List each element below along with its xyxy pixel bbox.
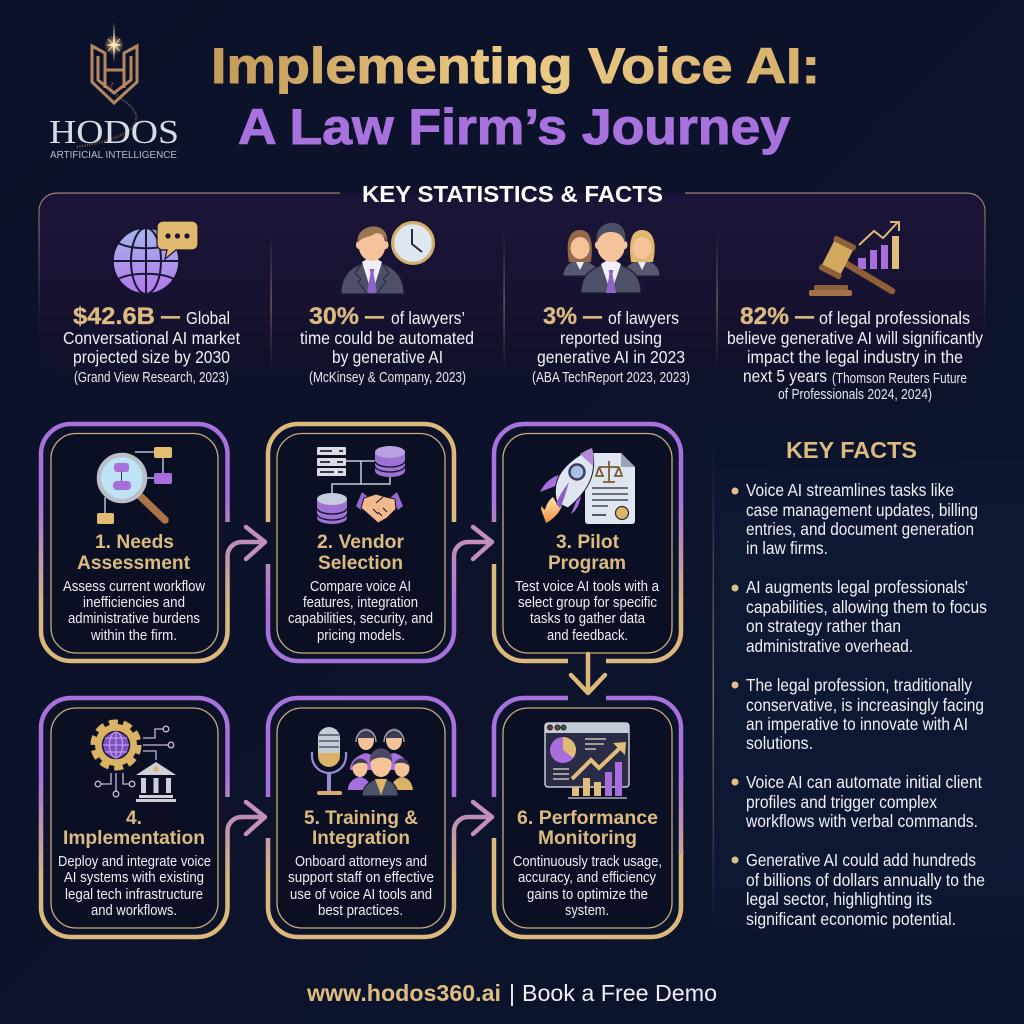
title bbox=[211, 38, 820, 155]
step description bbox=[63, 578, 205, 644]
stat 1: — bbox=[161, 303, 180, 330]
icon: magnifier over flowchart bbox=[97, 447, 172, 524]
step description: and workflows. bbox=[91, 902, 177, 919]
fact 2 bbox=[732, 577, 987, 656]
fact 4 bbox=[732, 772, 982, 831]
step title: 3. Pilot bbox=[556, 531, 619, 553]
logo: Hodos Artificial Intelligence bbox=[49, 22, 179, 161]
stat 4 bbox=[727, 222, 983, 403]
stat 2 bbox=[300, 220, 474, 386]
card frame bbox=[494, 424, 681, 661]
stat 4 text: believe generative AI will significantly bbox=[727, 328, 983, 348]
step description: use of voice AI tools and bbox=[290, 886, 432, 903]
fact 3: The legal profession, traditionally bbox=[746, 675, 972, 695]
step title: Monitoring bbox=[538, 827, 637, 849]
stat 3 text: reported using bbox=[560, 328, 662, 348]
stat 1 text: projected size by 2030 bbox=[73, 347, 230, 367]
arrow: step 3 to step 6 bbox=[571, 654, 605, 693]
step description: tasks to gather data bbox=[530, 610, 646, 627]
footer call to action: | bbox=[509, 980, 515, 1006]
card frame bbox=[494, 838, 681, 937]
icon: servers, databases and handshake bbox=[317, 446, 405, 524]
step description: accuracy, and efficiency bbox=[518, 869, 656, 886]
icon: rocket and legal document bbox=[540, 448, 635, 524]
title line 1: Implementing Voice AI: bbox=[211, 38, 820, 94]
fact 1: in law firms. bbox=[746, 538, 828, 558]
process step 4: implementation bbox=[41, 698, 263, 937]
step description: inefficiencies and bbox=[83, 594, 185, 611]
step description: administrative burdens bbox=[68, 610, 200, 627]
fact 4: profiles and trigger complex bbox=[746, 792, 937, 812]
fact 2: administrative overhead. bbox=[746, 636, 913, 656]
stat 1 bbox=[63, 221, 240, 386]
icon: star sparkle bbox=[104, 22, 124, 62]
process step 6: performance monitoring bbox=[494, 698, 681, 937]
stat 3 text: of lawyers bbox=[608, 308, 679, 328]
stat 4 text: of legal professionals bbox=[819, 308, 970, 328]
step description: features, integration bbox=[303, 594, 418, 611]
fact 4: Voice AI can automate initial client bbox=[746, 772, 982, 792]
icon: lawyer with clock bbox=[341, 220, 436, 294]
key facts heading: KEY FACTS bbox=[786, 437, 917, 463]
step description: Onboard attorneys and bbox=[295, 853, 427, 870]
fact 3: an imperative to innovate with AI bbox=[746, 714, 968, 734]
step title: 6. Performance bbox=[517, 807, 658, 829]
step description: system. bbox=[565, 902, 609, 919]
step description: capabilities, security, and bbox=[288, 610, 433, 627]
fact 5: legal sector, highlighting its bbox=[746, 889, 932, 909]
stat 3 value: 3% bbox=[543, 303, 577, 330]
stat 3 text: generative AI in 2023 bbox=[537, 347, 685, 367]
step description: Continuously track usage, bbox=[513, 853, 662, 870]
logo wordmark: HODOS bbox=[49, 114, 179, 151]
logo tagline: ARTIFICIAL INTELLIGENCE bbox=[50, 150, 177, 161]
stat 2 text bbox=[300, 308, 474, 386]
stat 4 text: next 5 years bbox=[743, 366, 827, 386]
stat 4 value: 82% bbox=[740, 303, 789, 330]
step title bbox=[77, 531, 190, 574]
stat 3 text bbox=[532, 308, 690, 386]
stat 3: — bbox=[583, 303, 602, 330]
step description bbox=[513, 853, 662, 919]
icon: gavel and rising chart bbox=[809, 222, 899, 296]
fact 1: Voice AI streamlines tasks like bbox=[746, 480, 954, 500]
section heading: KEY STATISTICS & FACTS bbox=[362, 181, 663, 207]
card frame bbox=[41, 698, 263, 937]
step description bbox=[288, 578, 433, 644]
icon: shield monogram bbox=[92, 46, 137, 103]
step title bbox=[317, 531, 404, 574]
step description: legal tech infrastructure bbox=[65, 886, 203, 903]
stat 1 text: Global bbox=[186, 308, 230, 328]
panel: key facts bbox=[712, 437, 987, 935]
stat 3 bbox=[532, 223, 690, 386]
step title: 1. Needs bbox=[95, 531, 174, 553]
panel: key statistics bbox=[39, 181, 985, 410]
fact 1: entries, and document generation bbox=[746, 519, 974, 539]
step description: gains to optimize the bbox=[527, 886, 648, 903]
icon: group of lawyers bbox=[563, 223, 660, 293]
stat 2: — bbox=[365, 303, 384, 330]
fact 5: of billions of dollars annually to the bbox=[746, 870, 985, 890]
step description: best practices. bbox=[318, 902, 403, 919]
arrow: step 2 to step 3 bbox=[473, 527, 492, 559]
footer call to action: Book a Free Demo bbox=[522, 980, 717, 1006]
stat 4: — bbox=[795, 303, 814, 330]
step title: 2. Vendor bbox=[317, 531, 404, 553]
stat 1 value: $42.6B bbox=[73, 303, 155, 330]
fact 3 bbox=[732, 675, 984, 753]
step description: Deploy and integrate voice bbox=[58, 853, 211, 870]
arrow: step 4 to step 5 bbox=[246, 802, 265, 834]
step description bbox=[288, 853, 434, 919]
fact 3: solutions. bbox=[746, 733, 813, 753]
footer call to action: www.hodos360.ai bbox=[306, 980, 501, 1006]
step title: Integration bbox=[312, 827, 410, 849]
step description: and feedback. bbox=[547, 627, 628, 644]
stat 4 text: impact the legal industry in the bbox=[747, 347, 963, 367]
step title bbox=[63, 807, 205, 849]
step title bbox=[304, 807, 418, 849]
step description: select group for specific bbox=[518, 594, 657, 611]
process step 1: needs assessment bbox=[41, 424, 263, 661]
stat 2 text: of lawyers’ bbox=[391, 308, 465, 328]
step title: Program bbox=[548, 552, 626, 574]
card frame bbox=[268, 424, 454, 522]
stat 4 text: of Professionals 2024, 2024) bbox=[778, 387, 932, 403]
step title bbox=[548, 531, 626, 574]
stat 2 text: time could be automated bbox=[300, 328, 474, 348]
panel background bbox=[39, 193, 985, 410]
fact 2: on strategy rather than bbox=[746, 616, 901, 636]
stat 2 value: 30% bbox=[309, 303, 359, 330]
title line 2: A Law Firm’s Journey bbox=[238, 99, 790, 155]
step description: Assess current workflow bbox=[63, 578, 205, 595]
fact 5: significant economic potential. bbox=[746, 909, 956, 929]
step title: 4. bbox=[126, 807, 142, 829]
step description bbox=[58, 853, 211, 919]
step description: within the firm. bbox=[90, 627, 177, 644]
stat 1 text bbox=[63, 308, 240, 386]
fact 2: capabilities, allowing them to focus bbox=[746, 597, 987, 617]
fact 1: case management updates, billing bbox=[746, 500, 978, 520]
stat 1 text: (Grand View Research, 2023) bbox=[74, 370, 229, 386]
fact 5: Generative AI could add hundreds bbox=[746, 850, 976, 870]
step description bbox=[515, 578, 660, 644]
process step 3: pilot program bbox=[494, 424, 681, 661]
fact 1 bbox=[732, 480, 978, 558]
fact 5 bbox=[732, 850, 985, 929]
stat 2 text: by generative AI bbox=[332, 347, 443, 367]
card frame bbox=[41, 424, 263, 661]
step description: Compare voice AI bbox=[310, 578, 411, 595]
card frame bbox=[268, 698, 454, 797]
stat 2 text: (McKinsey & Company, 2023) bbox=[309, 370, 466, 386]
fact 4: workflows with verbal commands. bbox=[745, 811, 978, 831]
stat 1 text: Conversational AI market bbox=[63, 328, 240, 348]
step title: Implementation bbox=[63, 827, 205, 849]
icon: dashboard with growth chart bbox=[545, 723, 629, 798]
fact 3: conservative, is increasingly facing bbox=[746, 695, 984, 715]
step description: pricing models. bbox=[317, 627, 405, 644]
stat 4 text: (Thomson Reuters Future bbox=[832, 371, 967, 387]
step description: support staff on effective bbox=[288, 869, 434, 886]
arrow: step 5 to step 6 bbox=[473, 802, 492, 834]
step description: AI systems with existing bbox=[64, 869, 204, 886]
step description: Test voice AI tools with a bbox=[515, 578, 660, 595]
process step 5: training and integration bbox=[268, 698, 490, 937]
process step 2: vendor selection bbox=[268, 424, 490, 661]
icon: globe with chat bubble bbox=[113, 221, 198, 294]
step title: Assessment bbox=[77, 552, 190, 574]
stat 4 text bbox=[727, 308, 983, 403]
icon: gear, circuit and courthouse bbox=[93, 722, 176, 802]
fact 2: AI augments legal professionals' bbox=[746, 577, 968, 597]
footer call to action bbox=[306, 980, 717, 1006]
stat 3 text: (ABA TechReport 2023, 2023) bbox=[532, 370, 690, 386]
step title: 5. Training & bbox=[304, 807, 418, 829]
icon: gold dust swirl bbox=[76, 83, 136, 147]
step title: Selection bbox=[318, 552, 403, 574]
icon: microphone and headset team bbox=[312, 727, 413, 796]
arrow: step 1 to step 2 bbox=[246, 527, 265, 559]
step title bbox=[517, 807, 658, 849]
